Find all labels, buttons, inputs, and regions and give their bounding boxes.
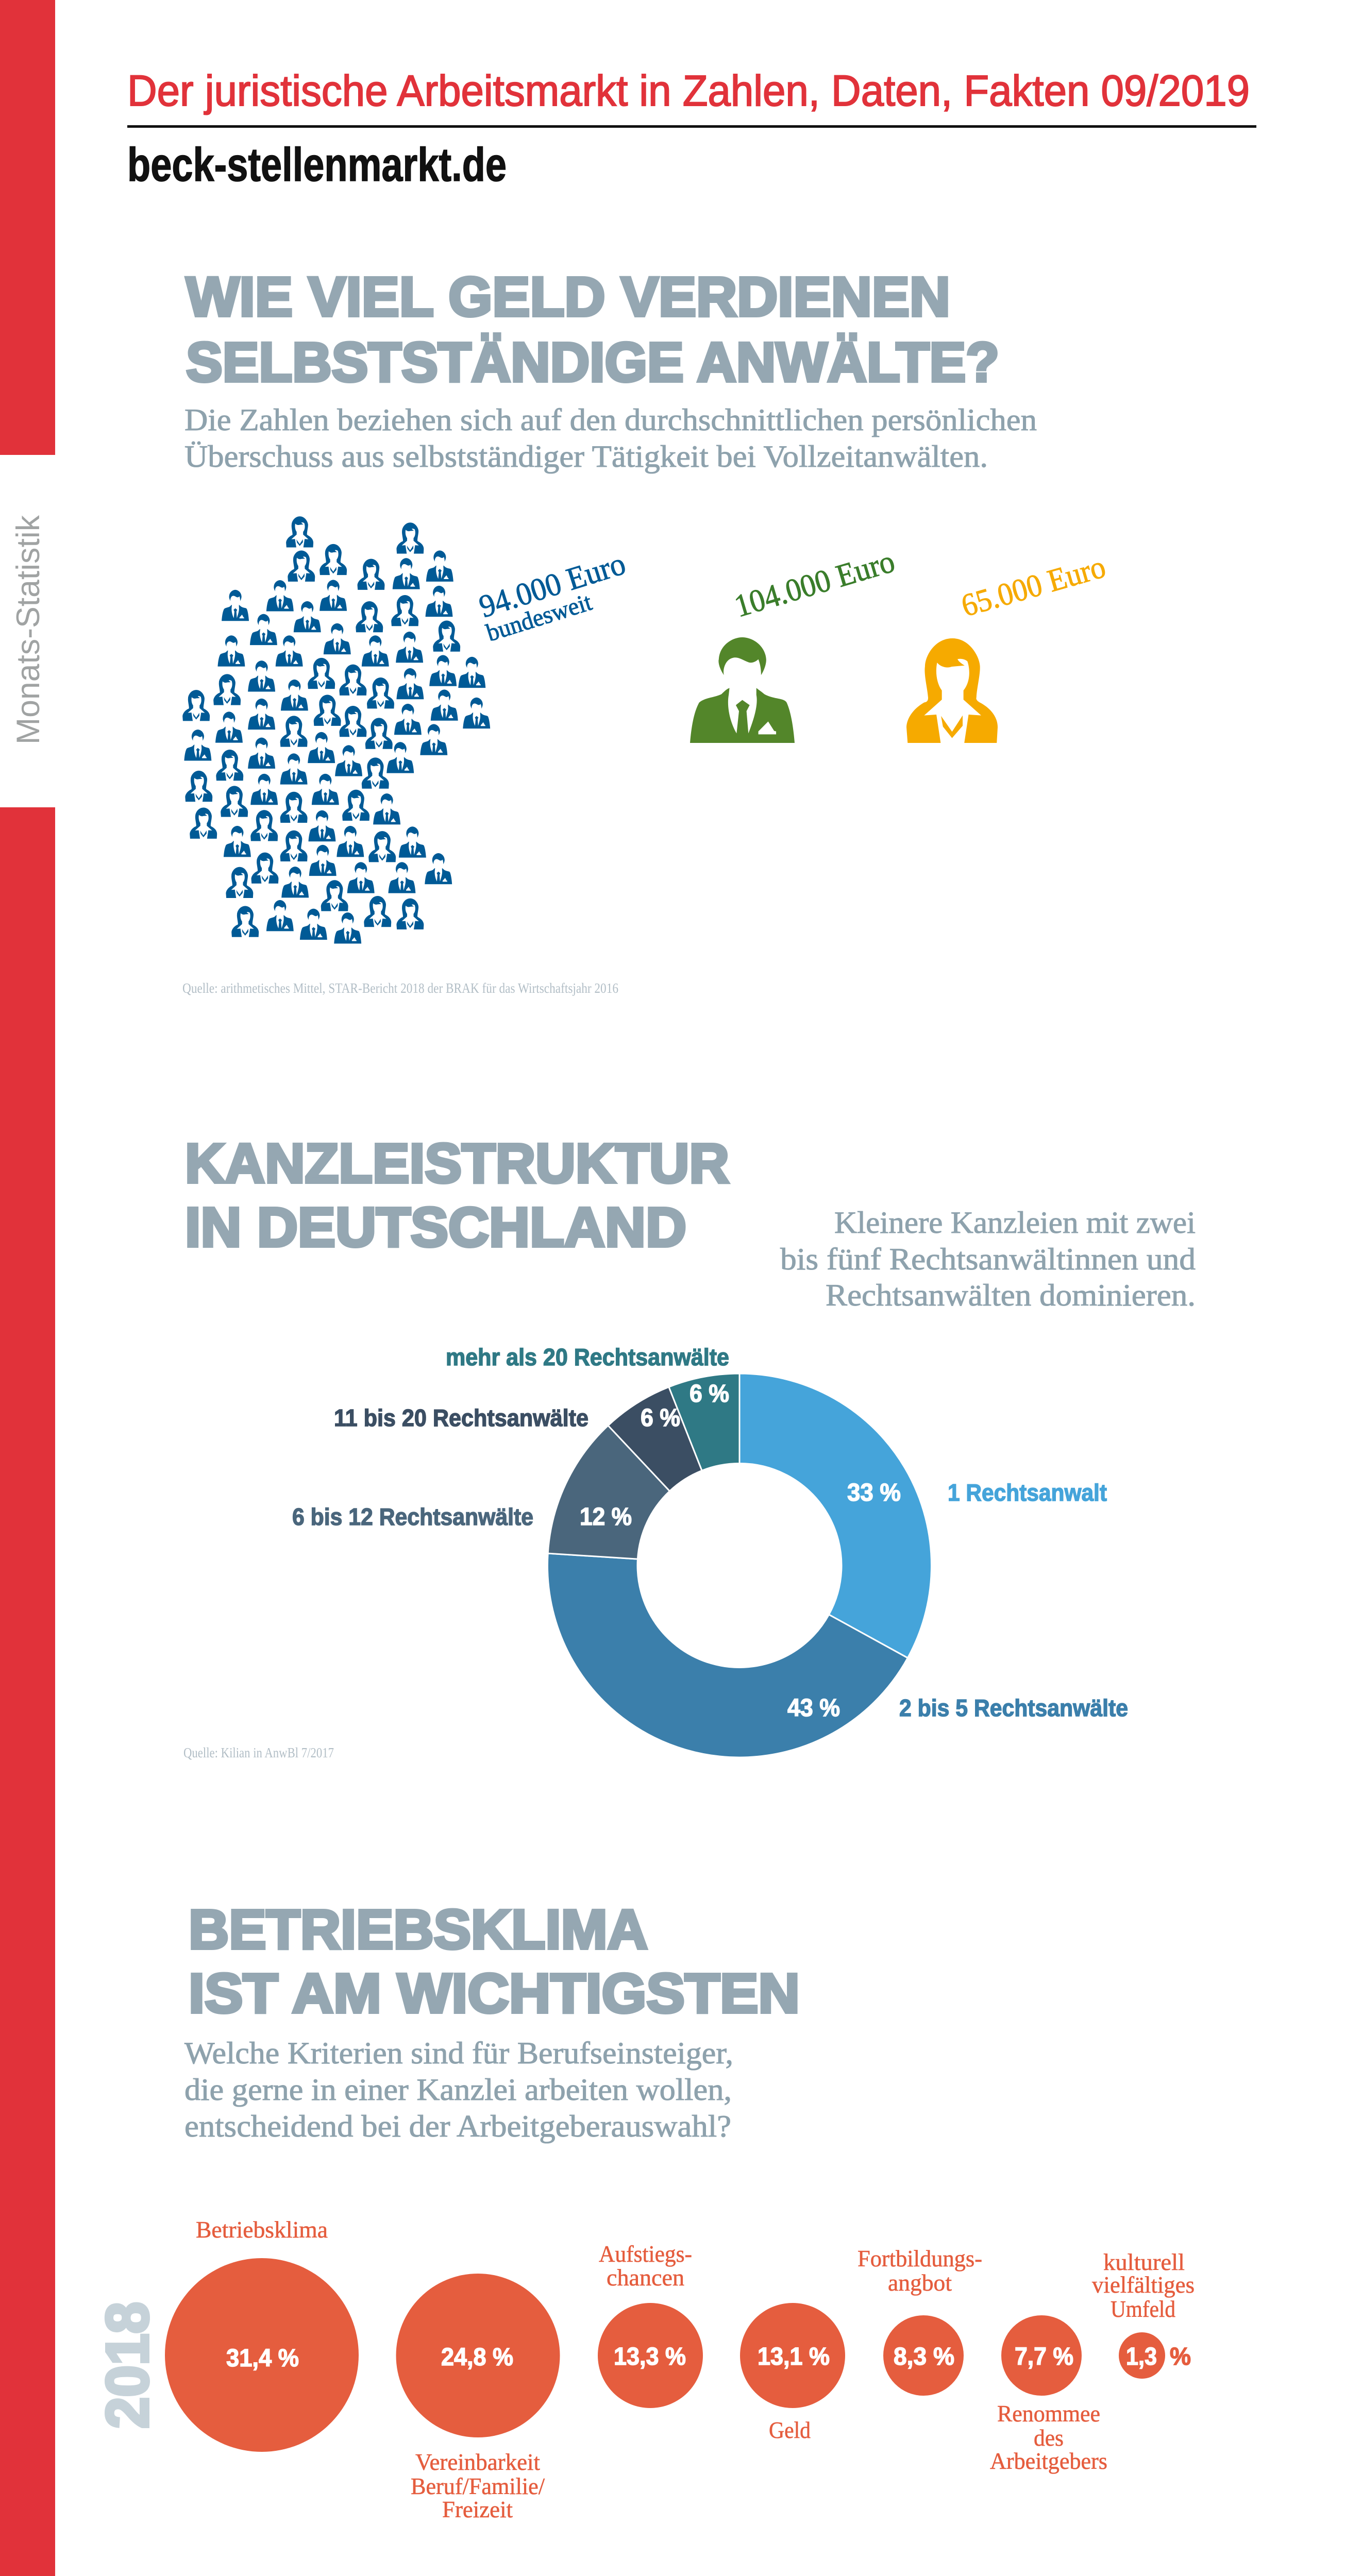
bubble percentages: 31,4 %: [226, 2345, 299, 2372]
bubble labels: Renommee: [997, 2400, 1100, 2427]
donut percentages: [580, 1380, 901, 1722]
intro text: Kleinere Kanzleien mit zwei: [834, 1206, 1196, 1240]
panel: firm structure: [183, 1132, 1196, 1760]
side label: Monats-Statistik: Monats-Statistik: [10, 515, 46, 744]
bubble labels: Vereinbarkeit: [415, 2449, 540, 2475]
panel: income of self-employed lawyers: [182, 265, 1109, 996]
heading: Kanzleistruktur: KANZLEISTRUKTUR: [185, 1132, 729, 1194]
bubble percentages: 13,1 %: [758, 2343, 830, 2370]
bubble labels: Freizeit: [442, 2496, 513, 2522]
bubble percentages: [226, 2343, 1191, 2372]
intro text: [780, 1206, 1196, 1312]
heading: Kanzleistruktur: [185, 1132, 729, 1258]
germany map of lawyer icons: [182, 516, 490, 943]
donut labels: [292, 1344, 1128, 1721]
heading: Wie viel Geld: WIE VIEL GELD VERDIENEN: [186, 265, 950, 328]
bubble labels: Umfeld: [1111, 2296, 1175, 2322]
intro text: bis fünf Rechtsanwältinnen und: [780, 1242, 1196, 1276]
bubble chart: [165, 2258, 1165, 2452]
intro text: [184, 403, 1037, 473]
bubble percentages: %: [1170, 2343, 1191, 2370]
donut percentages: 43 %: [787, 1694, 840, 1722]
bubble labels: kulturell: [1103, 2249, 1185, 2275]
heading: Betriebsklima: IST AM WICHTIGSTEN: [189, 1962, 800, 2024]
label: 65.000 Euro: 65.000 Euro: [957, 549, 1109, 623]
bubble labels: angbot: [888, 2269, 952, 2296]
icon: green male lawyer: [690, 637, 795, 743]
page header: [127, 66, 1256, 191]
bubble labels: vielfältiges: [1092, 2272, 1195, 2298]
bubble labels: chancen: [607, 2264, 684, 2291]
label: 104.000 Euro: 104.000 Euro: [731, 544, 899, 624]
intro text: Überschuss aus selbstständiger Tätigkeit bei Vollzeitanwälten.: [184, 439, 988, 473]
donut labels: mehr als 20 Rechtsanwälte: [446, 1344, 729, 1370]
label: 94.000 Euro: 94.000 Euro: [475, 546, 630, 624]
donut percentages: 12 %: [580, 1503, 632, 1531]
red side bar: [0, 0, 55, 2576]
donut labels: 11 bis 20 Rechtsanwälte: [334, 1404, 589, 1431]
intro text: entscheidend bei der Arbeitgeberauswahl?: [184, 2109, 731, 2143]
donut percentages: 6 %: [690, 1380, 729, 1408]
bubble percentages: 8,3 %: [894, 2343, 954, 2370]
header brand: beck-stellenmarkt.de: [127, 139, 507, 191]
bubble labels: Geld: [769, 2417, 811, 2443]
header title: Der juristische Arbeitsmarkt in Zahlen, Daten, Fakten 09/2019: [127, 66, 1250, 115]
intro text: Rechtsanwälten dominieren.: [826, 1278, 1196, 1312]
bubble percentages: 7,7 %: [1015, 2343, 1073, 2370]
intro text: Welche Kriterien sind für Berufseinsteiger,: [184, 2036, 733, 2070]
donut percentages: 6 %: [641, 1404, 680, 1432]
year label: 2018: [94, 2302, 161, 2429]
bubble labels: Fortbildungs-: [858, 2245, 982, 2272]
source note: Quelle: arithmetisches Mittel, STAR-Bericht 2018 der BRAK für das Wirtschaftsjahr 2016: [182, 980, 618, 996]
bubble percentages: 13,3 %: [614, 2343, 686, 2370]
heading: Betriebsklima: BETRIEBSKLIMA: [189, 1898, 648, 1960]
heading: Kanzleistruktur: IN DEUTSCHLAND: [185, 1196, 686, 1258]
intro text: die gerne in einer Kanzlei arbeiten wollen,: [184, 2073, 732, 2107]
bubble labels: [196, 2216, 1195, 2522]
bubble percentages: 1,3: [1126, 2343, 1157, 2370]
bubble labels: des: [1034, 2425, 1064, 2451]
heading: Wie viel Geld: SELBSTSTÄNDIGE ANWÄLTE?: [186, 331, 999, 393]
donut labels: 2 bis 5 Rechtsanwälte: [899, 1694, 1128, 1721]
heading: Wie viel Geld: [186, 265, 999, 393]
bubble labels: Betriebsklima: [196, 2216, 328, 2243]
donut chart: [547, 1374, 932, 1757]
bubble labels: Beruf/Familie/: [411, 2473, 545, 2499]
bubble labels: Arbeitgebers: [990, 2448, 1107, 2474]
panel: working climate: [94, 1898, 1195, 2576]
source note: Quelle: Kilian in AnwBl 7/2017: [183, 1745, 334, 1760]
bubble percentages: 24,8 %: [441, 2344, 513, 2371]
donut percentages: 33 %: [847, 1479, 901, 1506]
intro text: Die Zahlen beziehen sich auf den durchschnittlichen persönlichen: [184, 403, 1037, 437]
donut labels: 6 bis 12 Rechtsanwälte: [292, 1503, 533, 1530]
intro text: [184, 2036, 733, 2143]
donut labels: 1 Rechtsanwalt: [948, 1479, 1107, 1506]
icon: orange female lawyer: [906, 638, 998, 743]
heading: Betriebsklima: [189, 1898, 800, 2024]
label: bundesweit: bundesweit: [483, 588, 595, 647]
bubble labels: Aufstiegs-: [599, 2241, 692, 2267]
